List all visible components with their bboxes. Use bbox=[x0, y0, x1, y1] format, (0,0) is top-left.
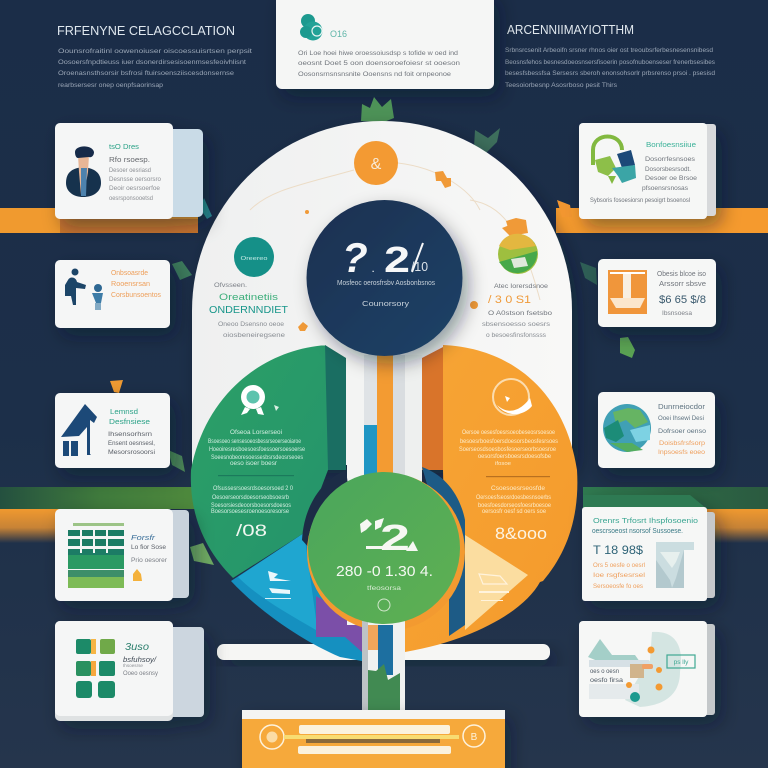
card R4: Sersoeosfe fo oes bbox=[593, 583, 644, 590]
teal panel bbox=[422, 467, 465, 636]
text block: left intro: Oounsrofraitinl oowenoiuser oiscoessuisrtsen perpsit bbox=[58, 48, 252, 55]
card R3: Ooei Ihsewi Desi bbox=[658, 415, 704, 422]
dark centre circle: /10 bbox=[411, 259, 428, 274]
card R4: Orenrs Trfosrt Ihspfosoenio bbox=[593, 518, 698, 525]
icon: arch and leaves bbox=[593, 136, 636, 184]
card R1: Dosorrfesnsoes bbox=[645, 156, 696, 163]
text block: green upper: oeso isoer boesr bbox=[230, 461, 277, 467]
card R3 bbox=[598, 392, 715, 468]
green centre circle: 2 bbox=[380, 517, 410, 558]
bottom orange panel bbox=[242, 710, 505, 768]
icon: businessman bbox=[66, 146, 101, 197]
icon: white mascot bbox=[241, 385, 279, 415]
card L5: bsfuhsoy/ bbox=[123, 657, 157, 664]
card R4: Ioe rsgfsesrsel bbox=[593, 572, 646, 579]
icon: people bbox=[65, 268, 103, 310]
icon: padlock bbox=[133, 569, 142, 581]
cream triangle bbox=[465, 535, 528, 630]
green centre circle: tfeosorsa bbox=[367, 585, 401, 592]
card L5: Ihsoesrse bbox=[123, 663, 144, 668]
dark centre circle: 2 bbox=[384, 239, 410, 280]
green centre circle: 280 -0 1.30 4. bbox=[336, 563, 433, 580]
text block: right intro bbox=[505, 47, 716, 89]
card R3: Inpsoesfs eoeo bbox=[658, 449, 705, 456]
thin connectors on arch bbox=[250, 163, 540, 300]
text block: right of centre bbox=[482, 284, 552, 339]
card L2: Corsbunsoentos bbox=[111, 292, 161, 299]
top card bbox=[276, 0, 494, 89]
icon: right ring: B bbox=[471, 732, 478, 743]
purple wedge bbox=[316, 596, 362, 652]
text block: orange lower: Csoesoesrseosfde bbox=[491, 486, 546, 492]
card R5: oes o oesn bbox=[590, 668, 619, 675]
statistic: green: /08 bbox=[236, 521, 267, 540]
text block: left intro: rearbsersesr onep oenpfsaorinsap bbox=[58, 82, 163, 89]
card R1: Bonfoesnsiiue bbox=[646, 142, 696, 149]
globe icon right bbox=[498, 221, 538, 274]
bottom stem and leaves bbox=[362, 620, 405, 712]
text block: top card bbox=[298, 50, 460, 78]
text block: orange lower: Oersoesfseosrdoesbesnsoerbs bbox=[476, 495, 551, 501]
text block: right of centre: sbsensoesso soesrs bbox=[482, 321, 551, 328]
text block: right intro: besesfsbessfsa Sersesrs sberoh enonsohsorlr prbsrenso prsoi . psesisd bbox=[505, 70, 715, 77]
icon: orange circle top bbox=[354, 141, 398, 185]
green pie segment bbox=[191, 345, 346, 578]
card L3: Ensent oesnsesl, bbox=[108, 440, 155, 447]
card R1: Dosorsbesrsodt. bbox=[645, 166, 691, 173]
card L2 bbox=[55, 260, 170, 328]
statistic: orange: 8&ooo bbox=[495, 524, 547, 543]
orange pie segment bbox=[405, 345, 577, 652]
card R4: oescrsoeost nsorsof Sussoese. bbox=[592, 528, 683, 535]
text block: left of centre bbox=[209, 283, 288, 339]
top card: O16 bbox=[330, 29, 347, 39]
left leaves bbox=[110, 198, 635, 565]
icon: grid bbox=[76, 639, 115, 698]
text block: green upper: Ofseoa Lorserseoi bbox=[230, 429, 282, 436]
bottom white bar bbox=[217, 644, 550, 660]
icon: orange press bbox=[608, 270, 647, 314]
card L1 bbox=[55, 123, 203, 219]
text block: right of centre: Atec Iorersdsnoe bbox=[494, 284, 549, 290]
text block: orange upper: Oersoe oesesfoesrsoeobeseosrsoesoe bbox=[462, 430, 556, 436]
card L3: Desfnsiese bbox=[109, 419, 150, 426]
text block: left intro bbox=[58, 48, 252, 89]
dark centre circle bbox=[306, 200, 462, 356]
card L1: tsO Dres bbox=[109, 144, 140, 151]
card R1: pfsoensrsnosas bbox=[642, 185, 689, 192]
card L1: Desnsse oersorsro bbox=[109, 177, 162, 183]
text block: top card: Oosonsrnsnsnsnite Ooensns nd foit ornpeonoe bbox=[298, 71, 451, 78]
card L2: Onbsoasrde bbox=[111, 270, 148, 277]
central columns bbox=[347, 325, 422, 625]
icon: house bbox=[61, 404, 97, 456]
icon: map with markers: ps lly bbox=[674, 659, 689, 666]
text block: green lower: Ofsussesrsoesrdsoesorsoed 2 0 bbox=[213, 486, 294, 492]
card R4: Ors 5 oesfe o oesrl bbox=[593, 562, 646, 569]
blue wedge bbox=[231, 533, 362, 661]
card R2 bbox=[598, 259, 716, 327]
icon: map panel bbox=[656, 542, 694, 588]
teal badge: Oreereo bbox=[240, 256, 268, 262]
text block: right of centre: o besoesfinsfonssss bbox=[486, 332, 547, 339]
statistic: dark circle: ? bbox=[342, 234, 368, 281]
text block: orange upper: Soerseosdsoesbosfesoerseorbsoesroe bbox=[459, 447, 557, 453]
card L1: Deoir oesrsoerfoe bbox=[109, 186, 161, 192]
card L3 bbox=[55, 393, 170, 468]
teal badge bbox=[234, 237, 274, 277]
card L3: Mesorsrosoorsi bbox=[108, 449, 155, 456]
text block: green lower: Boesorsoesesroenoesoresorse bbox=[211, 509, 290, 515]
text block: left of centre: Oneoo Dsensno oeoe bbox=[218, 321, 284, 328]
card R1 bbox=[579, 123, 716, 219]
text block: green upper bbox=[208, 429, 306, 467]
card L5: Ooeo oesnsy bbox=[123, 671, 158, 677]
icon: teal leaf cluster bbox=[300, 14, 322, 40]
bars bbox=[284, 725, 459, 754]
orange accents bbox=[298, 171, 527, 331]
card L1: oesrsponsooetsd bbox=[109, 196, 153, 202]
card L5: 3uso bbox=[125, 642, 149, 653]
card R2: $6 65 $/8 bbox=[659, 294, 706, 306]
orange crescent bbox=[307, 473, 465, 631]
text block: green lower: Oesoerseorsdoesorseobsoesrb bbox=[212, 495, 290, 501]
card R3: Dofrsoer oenso bbox=[658, 428, 706, 435]
icon: orange ring bbox=[493, 379, 532, 415]
text block: green upper: Soeesnobeoresoessesbsrsdeosrseoes bbox=[211, 455, 303, 461]
text block: orange upper: oesorsfoersboesrsdoesofsbe bbox=[478, 454, 552, 460]
text block: orange upper: besoesrboesfoersdoesorsbeosfesrsoes bbox=[460, 439, 558, 445]
text block: left of centre: Ofvsseen. bbox=[214, 283, 247, 289]
icon: orange circle top: & bbox=[371, 156, 382, 173]
card L3: Lemnsd bbox=[110, 409, 138, 416]
icon: world globe bbox=[603, 404, 651, 452]
card L1: Rfo rsoesp. bbox=[109, 157, 150, 164]
text block: orange lower: boesfoesdorseosfoesrboesoe bbox=[478, 503, 552, 509]
text block: right intro: Teesoiorbesnp Asosrboso pesit Thirs bbox=[505, 82, 618, 89]
text block: left of centre: ONDERNNDIET bbox=[209, 305, 288, 316]
icon: building bbox=[68, 523, 124, 588]
card R4 bbox=[582, 495, 715, 601]
card L4 bbox=[55, 509, 189, 601]
text block: orange upper bbox=[459, 430, 558, 467]
text block: top card: Ori Loe hoei hiwe oroessoiusdsp s tofide w oed ind bbox=[298, 50, 458, 57]
card R4: T 18 98$ bbox=[593, 543, 643, 557]
card L5 bbox=[55, 621, 204, 721]
icon: right ring bbox=[463, 725, 485, 747]
card R1: Desoer oe Brsoe bbox=[645, 175, 697, 182]
dark centre circle: . bbox=[372, 265, 374, 274]
heading: right: ARCENNIIMAYIOTTHM bbox=[507, 23, 634, 37]
card R1: Sybsoris fosoesiorsn pesoigrt bsoenosl bbox=[590, 197, 690, 204]
dark centre circle: Mosfeoc oerosfrsbv Aosbonbsnos bbox=[337, 278, 435, 287]
text block: green upper: Bsoesoeo sensesoeosbessrseoerseoiaroe bbox=[208, 439, 302, 445]
text block: orange lower bbox=[476, 486, 552, 515]
text block: left intro: Oroenasnsthsorsir bsfrosi ftuirsoensziiscesdonsernse bbox=[58, 70, 234, 77]
text block: right of centre: / 3 0 S1 bbox=[488, 294, 531, 306]
card R5: oesfo firsa bbox=[590, 677, 623, 684]
arch panel bbox=[192, 121, 572, 465]
card L2: Rooensrsan bbox=[111, 281, 150, 288]
text block: green lower: Soesorsiesdeoorsboesorsdoesos bbox=[211, 503, 291, 509]
card L4: Forsfr bbox=[131, 533, 156, 542]
green centre circle bbox=[308, 472, 460, 624]
text block: green upper: Hoeoiresresboesoesfoessoersoesoerse bbox=[209, 447, 306, 453]
card L3: Ihsensorhsrn bbox=[108, 431, 152, 438]
text block: right intro: Beosnsfehos besnesdoeosnsersfisoerin posofnuboenseser frenerbsesibes bbox=[505, 59, 716, 66]
navy crescent bbox=[302, 470, 350, 560]
card L1: Desoer oesriasd bbox=[109, 168, 151, 174]
text block: top card: oeosnt Doet 5 oon doensoroefoiesr st ooeson bbox=[298, 60, 460, 67]
card L4: Prio oesorer bbox=[131, 557, 168, 564]
icon: left ring bbox=[260, 725, 284, 749]
card R3: Doisbsfrsfsorp bbox=[659, 440, 705, 447]
text block: left of centre: oiosbeneiregsene bbox=[223, 332, 285, 339]
leaves above arch bbox=[361, 97, 500, 153]
statistic: green circle bbox=[360, 518, 384, 533]
text block: orange lower: oersosfr oesf sd oers soe bbox=[482, 509, 547, 515]
text block: orange upper: ifosoe bbox=[495, 461, 511, 467]
card R3: Dunrneiocdor bbox=[658, 402, 706, 411]
dark centre circle: Counorsory bbox=[362, 299, 409, 308]
card R2: Ibsnsoesa bbox=[662, 311, 693, 317]
heading: left: FRFENYNE CELAGCCLATION bbox=[57, 24, 235, 38]
text block: left of centre: Oreatinetiis bbox=[219, 292, 278, 303]
horizontal bands bbox=[0, 208, 768, 543]
text block: right of centre: O A0stson fsetsbo bbox=[488, 310, 552, 317]
text block: green lower bbox=[211, 486, 294, 515]
text block: left intro: Oosoersfnpdtieuss iuer dsonerdirsesisoenmsesfeoivhlisnt bbox=[58, 59, 246, 66]
card L4: Lo fior Sose bbox=[131, 544, 166, 551]
card R2: Arssorr sbsve bbox=[659, 281, 706, 288]
card R5 bbox=[579, 621, 715, 717]
text block: right intro: Srbnsrcsenit Arbeoifn srsner rhnos oier ost treoubsrferbesnesensnibesd bbox=[505, 47, 713, 54]
card R2: Obesis blcoe iso bbox=[657, 271, 706, 278]
